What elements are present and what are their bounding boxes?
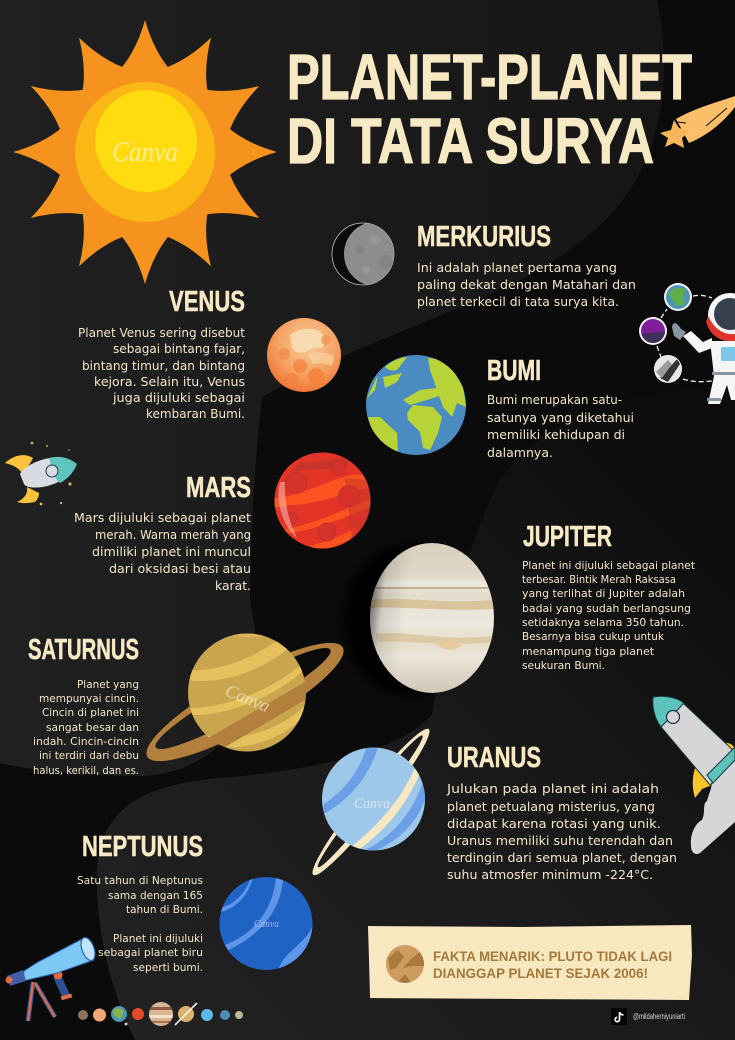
section: Neptunus text: sebagai planet biru — [98, 946, 203, 959]
callout: fakta menarik — [368, 925, 692, 1000]
section: Venus text: sebagai bintang fajar, — [113, 341, 245, 356]
section: Bumi text: satunya yang diketahui — [487, 410, 634, 425]
section: Mars text: merah. Warna merah yang — [95, 527, 251, 542]
planet: Merkurius — [332, 222, 394, 286]
section: Uranus text: URANUS — [447, 742, 541, 774]
section: Neptunus text: tahun di Bumi. — [126, 903, 203, 916]
section: Saturnus text: mempunyai cincin. — [39, 692, 139, 705]
section: Saturnus text: halus, kerikil, dan es. — [33, 764, 139, 777]
section: Neptunus text — [77, 831, 203, 974]
section: Neptunus text: sama dengan 165 — [108, 889, 203, 902]
section: Uranus text: Julukan pada planet ini adalah — [446, 781, 659, 796]
section: Merkurius text: planet terkecil di tata surya kita. — [417, 294, 619, 309]
planet: Uranus — [312, 728, 430, 876]
planet: Saturnus: Canva — [223, 680, 273, 716]
section: Venus text: kejora. Selain itu, Venus — [94, 374, 245, 389]
callout: fakta menarik: FAKTA MENARIK: PLUTO TIDAK LAGI — [433, 949, 672, 964]
planet: Venus — [267, 318, 341, 392]
section: Venus text — [78, 286, 245, 421]
planet: Neptunus: Canva — [254, 918, 279, 930]
section: Jupiter text: badai yang sudah berlangsung — [522, 602, 691, 615]
section: Saturnus text — [28, 634, 139, 777]
section: Jupiter text: yang terlihat di Jupiter adalah — [522, 587, 685, 600]
section: Mars text: karat. — [215, 578, 251, 593]
section: Uranus text — [446, 742, 677, 882]
section: Merkurius text — [417, 221, 636, 309]
section: Jupiter text: setidaknya selama 350 tahun. — [522, 616, 684, 629]
planet: Mars — [274, 452, 372, 552]
section: Saturnus text: SATURNUS — [28, 634, 139, 666]
section: Jupiter text: menampung tiga planet — [522, 645, 654, 658]
section: Neptunus text: seperti bumi. — [133, 961, 203, 974]
section: Uranus text: planet petualang misterius, yang — [447, 799, 655, 814]
icon: row of mini planets — [78, 1002, 243, 1026]
section: Uranus text: Uranus memiliki suhu terendah dan — [447, 833, 673, 848]
section: Neptunus text: Planet ini dijuluki — [113, 932, 203, 945]
section: Venus text: VENUS — [169, 286, 245, 318]
section: Saturnus text: indah. Cincin-cincin — [33, 735, 139, 748]
section: Saturnus text: sangat besar dan — [46, 721, 139, 734]
section: Mars text: Mars dijuluki sebagai planet — [74, 510, 251, 525]
planet: Bumi — [366, 355, 466, 455]
section: Jupiter text: seukuran Bumi. — [522, 659, 605, 672]
section: Bumi text: BUMI — [487, 355, 541, 387]
section: Mars text — [74, 472, 251, 593]
section: Bumi text: memiliki kehidupan di — [487, 427, 625, 442]
section: Saturnus text: Cincin di planet ini — [42, 706, 139, 719]
icon: astronaut with globes — [639, 283, 735, 404]
section: Venus text: bintang timur, dan bintang — [82, 358, 245, 373]
section: Jupiter text: Besarnya bisa cukup untuk — [522, 630, 665, 643]
section: Uranus text: didapat karena rotasi yang unik. — [447, 816, 661, 831]
title — [287, 41, 692, 177]
tiktok credit: @mildaherniyuniarti — [633, 1012, 685, 1021]
icon: sun — [13, 20, 277, 284]
section: Neptunus text: NEPTUNUS — [82, 831, 203, 863]
section: Mars text: dimiliki planet ini muncul — [92, 544, 251, 559]
planet: Uranus: Canva — [354, 796, 390, 812]
section: Merkurius text: paling dekat dengan Matahari dan — [417, 277, 636, 292]
icon: telescope — [6, 936, 98, 1021]
section: Uranus text: suhu atmosfer minimum -224°C. — [447, 867, 653, 882]
section: Jupiter text: JUPITER — [523, 521, 612, 553]
section: Bumi text: dalamnya. — [487, 445, 553, 460]
planet: Neptunus — [220, 877, 313, 972]
planet: Saturnus — [146, 634, 344, 762]
section: Saturnus text: ini terdiri dari debu — [39, 749, 139, 762]
section: Merkurius text: MERKURIUS — [417, 221, 551, 253]
icon: small rocket — [5, 442, 77, 505]
section: Merkurius text: Ini adalah planet pertama yang — [417, 260, 617, 275]
section: Bumi text: Bumi merupakan satu- — [487, 392, 622, 407]
tiktok credit — [611, 1008, 685, 1025]
section: Mars text: MARS — [186, 472, 251, 504]
section: Venus text: juga dijuluki sebagai — [112, 390, 245, 405]
section: Venus text: kembaran Bumi. — [146, 406, 245, 421]
icon: large rocket — [653, 696, 735, 854]
section: Bumi text — [487, 355, 634, 460]
planet: Jupiter — [344, 543, 495, 696]
section: Saturnus text: Planet yang — [77, 678, 139, 691]
section: Jupiter text: terbesar. Bintik Merah Raksasa — [522, 573, 676, 586]
section: Jupiter text: Planet ini dijuluki sebagai planet — [522, 559, 695, 572]
icon: sun: Canva — [112, 137, 178, 168]
section: Jupiter text — [522, 521, 695, 672]
section: Venus text: Planet Venus sering disebut — [78, 325, 245, 340]
icon: comet — [660, 96, 735, 148]
section: Neptunus text: Satu tahun di Neptunus — [77, 874, 203, 887]
icon: pluto — [386, 945, 424, 984]
callout: fakta menarik: DIANGGAP PLANET SEJAK 2006! — [433, 966, 648, 981]
section: Uranus text: terdingin dari semua planet, dengan — [447, 850, 677, 865]
section: Mars text: dari oksidasi besi atau — [109, 561, 251, 576]
